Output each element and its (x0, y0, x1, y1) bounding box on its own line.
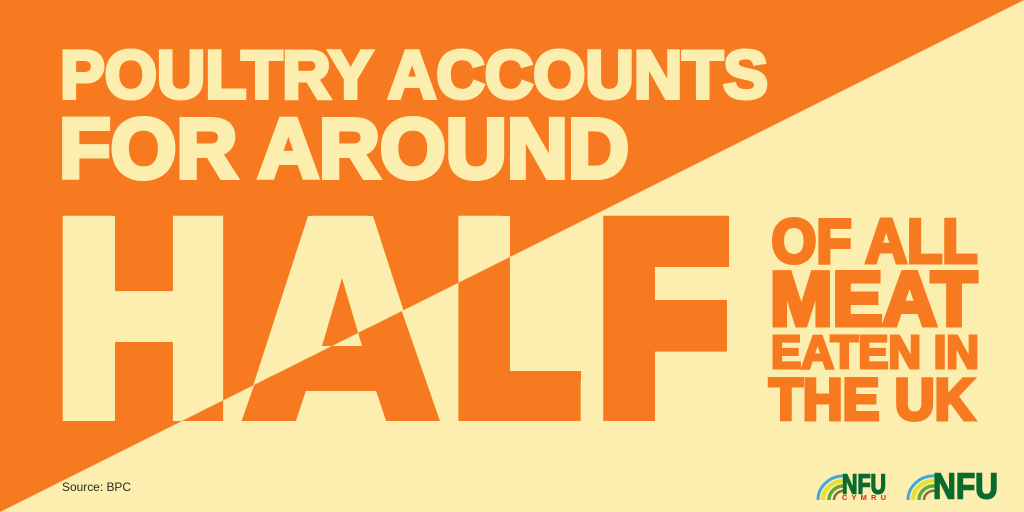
big word HALF, orange part below the diagonal (182, 216, 730, 421)
text block: of all meat eaten in the UK (769, 208, 979, 432)
text block: of all meat eaten in the UK: EATEN IN (771, 326, 979, 378)
heading: poultry accounts for around (59, 37, 768, 196)
text block: of all meat eaten in the UK: MEAT (770, 257, 977, 342)
big word HALF, orange part below the diagonal: L (450, 165, 581, 472)
logo: NFU: NFU (933, 466, 998, 506)
big word HALF, cream part above the diagonal: H (53, 165, 233, 472)
big word HALF, cream part above the diagonal: A (246, 165, 436, 472)
big word HALF, orange part below the diagonal: A (246, 165, 436, 472)
big word HALF, cream part above the diagonal (62, 216, 510, 421)
big word HALF, cream part above the diagonal: F (595, 165, 731, 472)
big word HALF, cream part above the diagonal: L (450, 165, 581, 472)
logo: NFU Cymru: NFU (842, 468, 886, 500)
logo: NFU Cymru (818, 468, 886, 502)
logo: NFU Cymru: CYMRU (842, 493, 886, 502)
heading: poultry accounts for around: FOR AROUND (59, 102, 629, 196)
logo: NFU (908, 466, 998, 506)
source note: Source: BPC (62, 480, 131, 494)
big word HALF, orange part below the diagonal: H (53, 165, 233, 472)
heading: poultry accounts for around: POULTRY ACCOUNTS (60, 37, 768, 113)
big word HALF, orange part below the diagonal: F (595, 165, 731, 472)
text block: of all meat eaten in the UK: THE UK (769, 368, 975, 432)
text block: of all meat eaten in the UK: OF ALL (772, 208, 978, 276)
